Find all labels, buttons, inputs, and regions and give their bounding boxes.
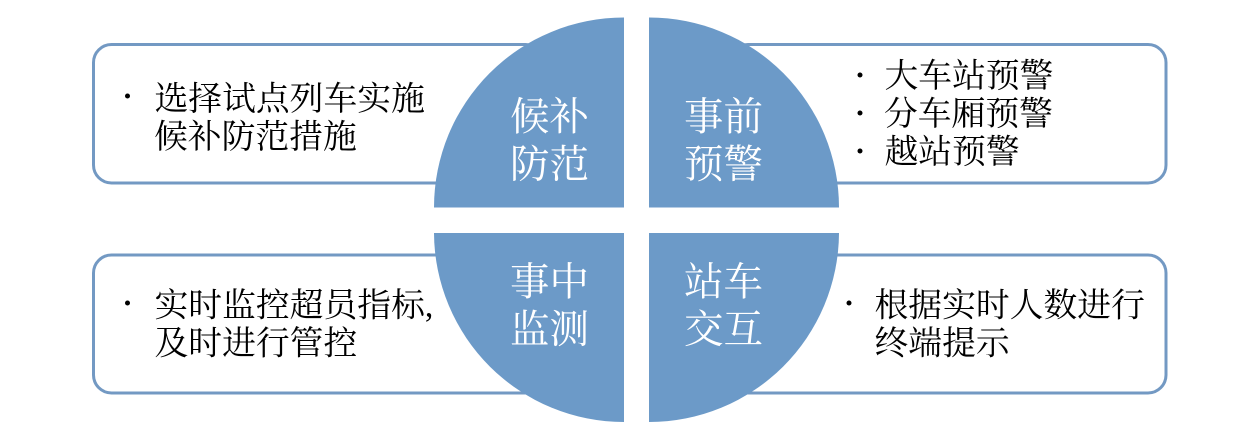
quarter: 站车交互 bbox=[649, 233, 839, 422]
quarter: 候补防范 bbox=[434, 18, 624, 208]
panel: top-right box: 分车厢预警 bbox=[884, 95, 1053, 133]
panel: bottom-left box: 及时进行管控 bbox=[154, 324, 357, 362]
panel: top-right box: 越站预警 bbox=[884, 133, 1020, 171]
quarter: 事前预警: 事前 bbox=[684, 96, 763, 140]
quarter: 站车交互: 交互 bbox=[684, 308, 763, 352]
panel: top-left box: 选择试点列车实施 bbox=[154, 80, 425, 118]
panel: bottom-right box: 根据实时人数进行 bbox=[874, 286, 1145, 324]
panel: top-right box: 大车站预警 bbox=[884, 57, 1053, 95]
quarter: 候补防范: 候补 bbox=[510, 96, 590, 140]
quarter: 事中监测: 事中 bbox=[510, 260, 589, 304]
panel: bottom-left box: 实时监控超员指标, bbox=[154, 286, 433, 324]
quarter: 事前预警 bbox=[649, 18, 839, 208]
panel: bottom-right box: 终端提示 bbox=[874, 324, 1011, 362]
panel: top-left box: 候补防范措施 bbox=[154, 118, 357, 156]
quarter: 候补防范: 防范 bbox=[510, 143, 589, 187]
quarter: 事前预警: 预警 bbox=[684, 143, 763, 187]
panel: bottom-right box bbox=[730, 255, 1166, 393]
panel: top-left box bbox=[94, 44, 544, 183]
panel: top-right box bbox=[730, 44, 1166, 183]
panel: bottom-left box bbox=[94, 255, 544, 393]
quarter: 站车交互: 站车 bbox=[684, 260, 763, 304]
quarter: 事中监测: 监测 bbox=[510, 308, 589, 352]
quarter: 事中监测 bbox=[434, 233, 624, 422]
